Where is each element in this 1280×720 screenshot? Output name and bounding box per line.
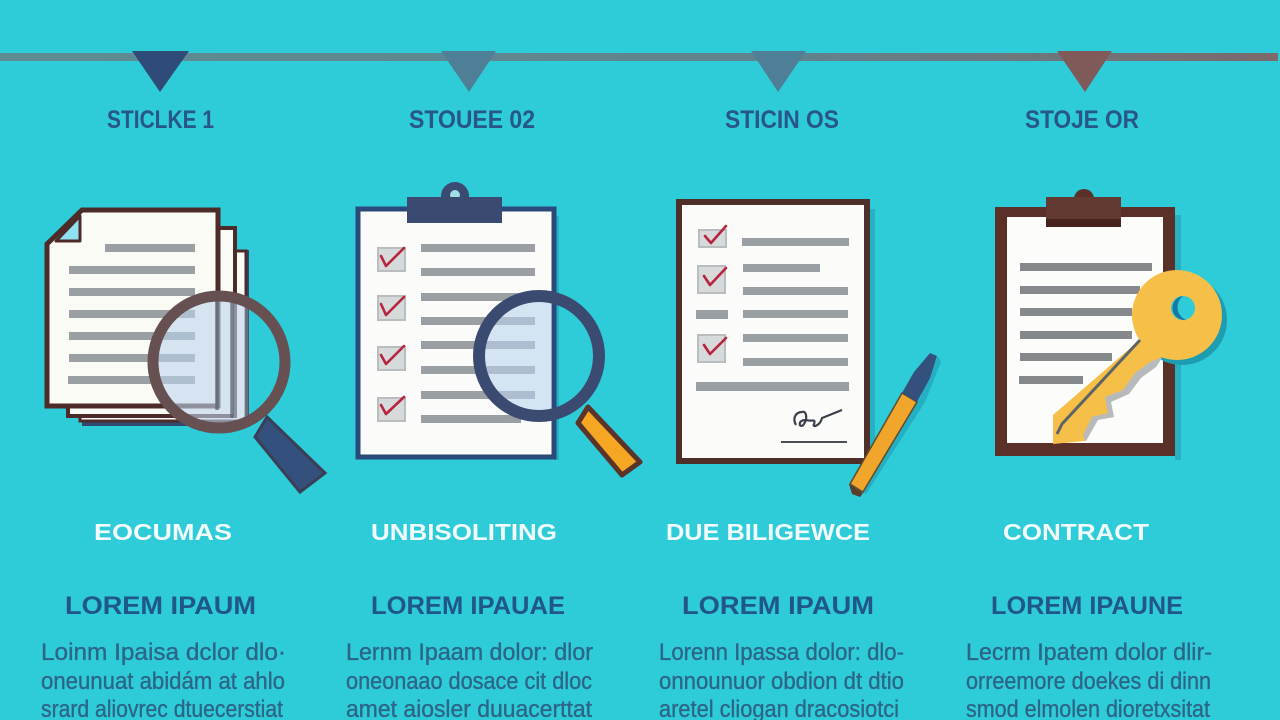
icon: checklist clipboard under magnifier <box>358 182 640 475</box>
body text 3: onnounuor obdion dt dtio <box>659 668 904 695</box>
body text 3: Lorenn Ipassa dolor: dlo- <box>659 639 904 666</box>
step title 4: CONTRACT <box>1003 519 1149 545</box>
body text 1 <box>41 639 286 720</box>
subheading 1: LOREM IPAUM <box>65 592 256 620</box>
step title 1: EOCUMAS <box>94 519 232 545</box>
stage label 3: STICIN OS <box>725 106 839 134</box>
body text 1: Loinm Ipaisa dclor dlo· <box>41 639 286 666</box>
body text 3 <box>659 639 904 720</box>
body text 2: Lernm Ipaam dolor: dlor <box>346 639 593 666</box>
body text 4 <box>966 639 1212 720</box>
body text 4: orreemore doekes di dinn <box>966 668 1211 695</box>
subheading 2: LOREM IPAUAE <box>371 592 565 620</box>
timeline marker 3 <box>751 51 806 92</box>
icon: signed document with pen <box>679 202 941 497</box>
icon: contract clipboard with key <box>995 189 1227 460</box>
body text 2 <box>346 639 593 720</box>
step title 3: DUE BILIGEWCE <box>666 519 870 545</box>
stage label 4: STOJE OR <box>1025 106 1139 134</box>
timeline marker 2 <box>441 51 496 92</box>
stage label 2: STOUEE 02 <box>409 106 535 134</box>
body text 2: oneonaao dosace cit dloc <box>346 668 592 695</box>
stage label 1: STICLKE 1 <box>107 106 214 134</box>
timeline marker 4 <box>1057 51 1112 92</box>
icon: documents under magnifier <box>47 210 325 492</box>
subheading 4: LOREM IPAUNE <box>991 592 1183 620</box>
body text 4: Lecrm Ipatem dolor dlir- <box>966 639 1212 666</box>
timeline marker 1 <box>132 51 189 92</box>
step title 2: UNBISOLITING <box>371 519 557 545</box>
subheading 3: LOREM IPAUM <box>682 592 874 620</box>
body text 1: oneunuat abidám at ahlo <box>41 668 285 695</box>
timeline bar <box>0 53 1278 61</box>
